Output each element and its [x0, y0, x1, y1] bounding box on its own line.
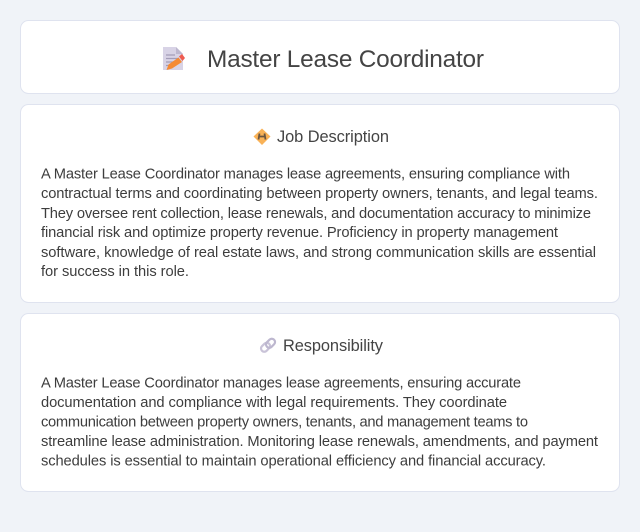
text block: responsibility: schedules is essential to maintain operational efficiency and financial accuracy.	[41, 454, 546, 470]
icon: document with pencil	[163, 47, 185, 70]
heading: job description: Job Description	[277, 128, 389, 146]
icon: orange diamond	[254, 128, 270, 145]
panel: responsibility	[20, 314, 620, 492]
text block: job description: They oversee rent collection, lease renewals, and documentation accuracy to minimize	[41, 206, 591, 222]
panel: job description	[20, 104, 620, 302]
text block: responsibility: A Master Lease Coordinator manages lease agreements, ensuring accurate	[41, 376, 521, 392]
text block: job description: for success in this role.	[41, 264, 189, 280]
title: Master Lease Coordinator	[207, 46, 484, 73]
panel: title card	[20, 20, 620, 94]
heading: responsibility: Responsibility	[283, 337, 384, 355]
icon: chain link	[260, 337, 276, 353]
text block: job description: A Master Lease Coordinator manages lease agreements, ensuring compliance with	[41, 166, 570, 182]
text block: responsibility: documentation and compliance with legal requirements. They coordinate	[41, 395, 507, 411]
text block: job description	[41, 166, 598, 280]
text block: responsibility: communication between property owners, tenants, and management teams to	[41, 414, 528, 430]
text block: job description: contractual terms and coordinating between property owners, tenants, and legal teams.	[41, 186, 598, 202]
text block: job description: software, knowledge of real estate laws, and strong communication skills are essential	[41, 245, 596, 261]
text block: job description: financial risk and optimize property revenue. Proficiency in property management	[41, 225, 558, 241]
text block: responsibility	[41, 376, 598, 470]
text block: responsibility: streamline lease administration. Monitoring lease renewals, amendments, and payment	[41, 434, 598, 450]
